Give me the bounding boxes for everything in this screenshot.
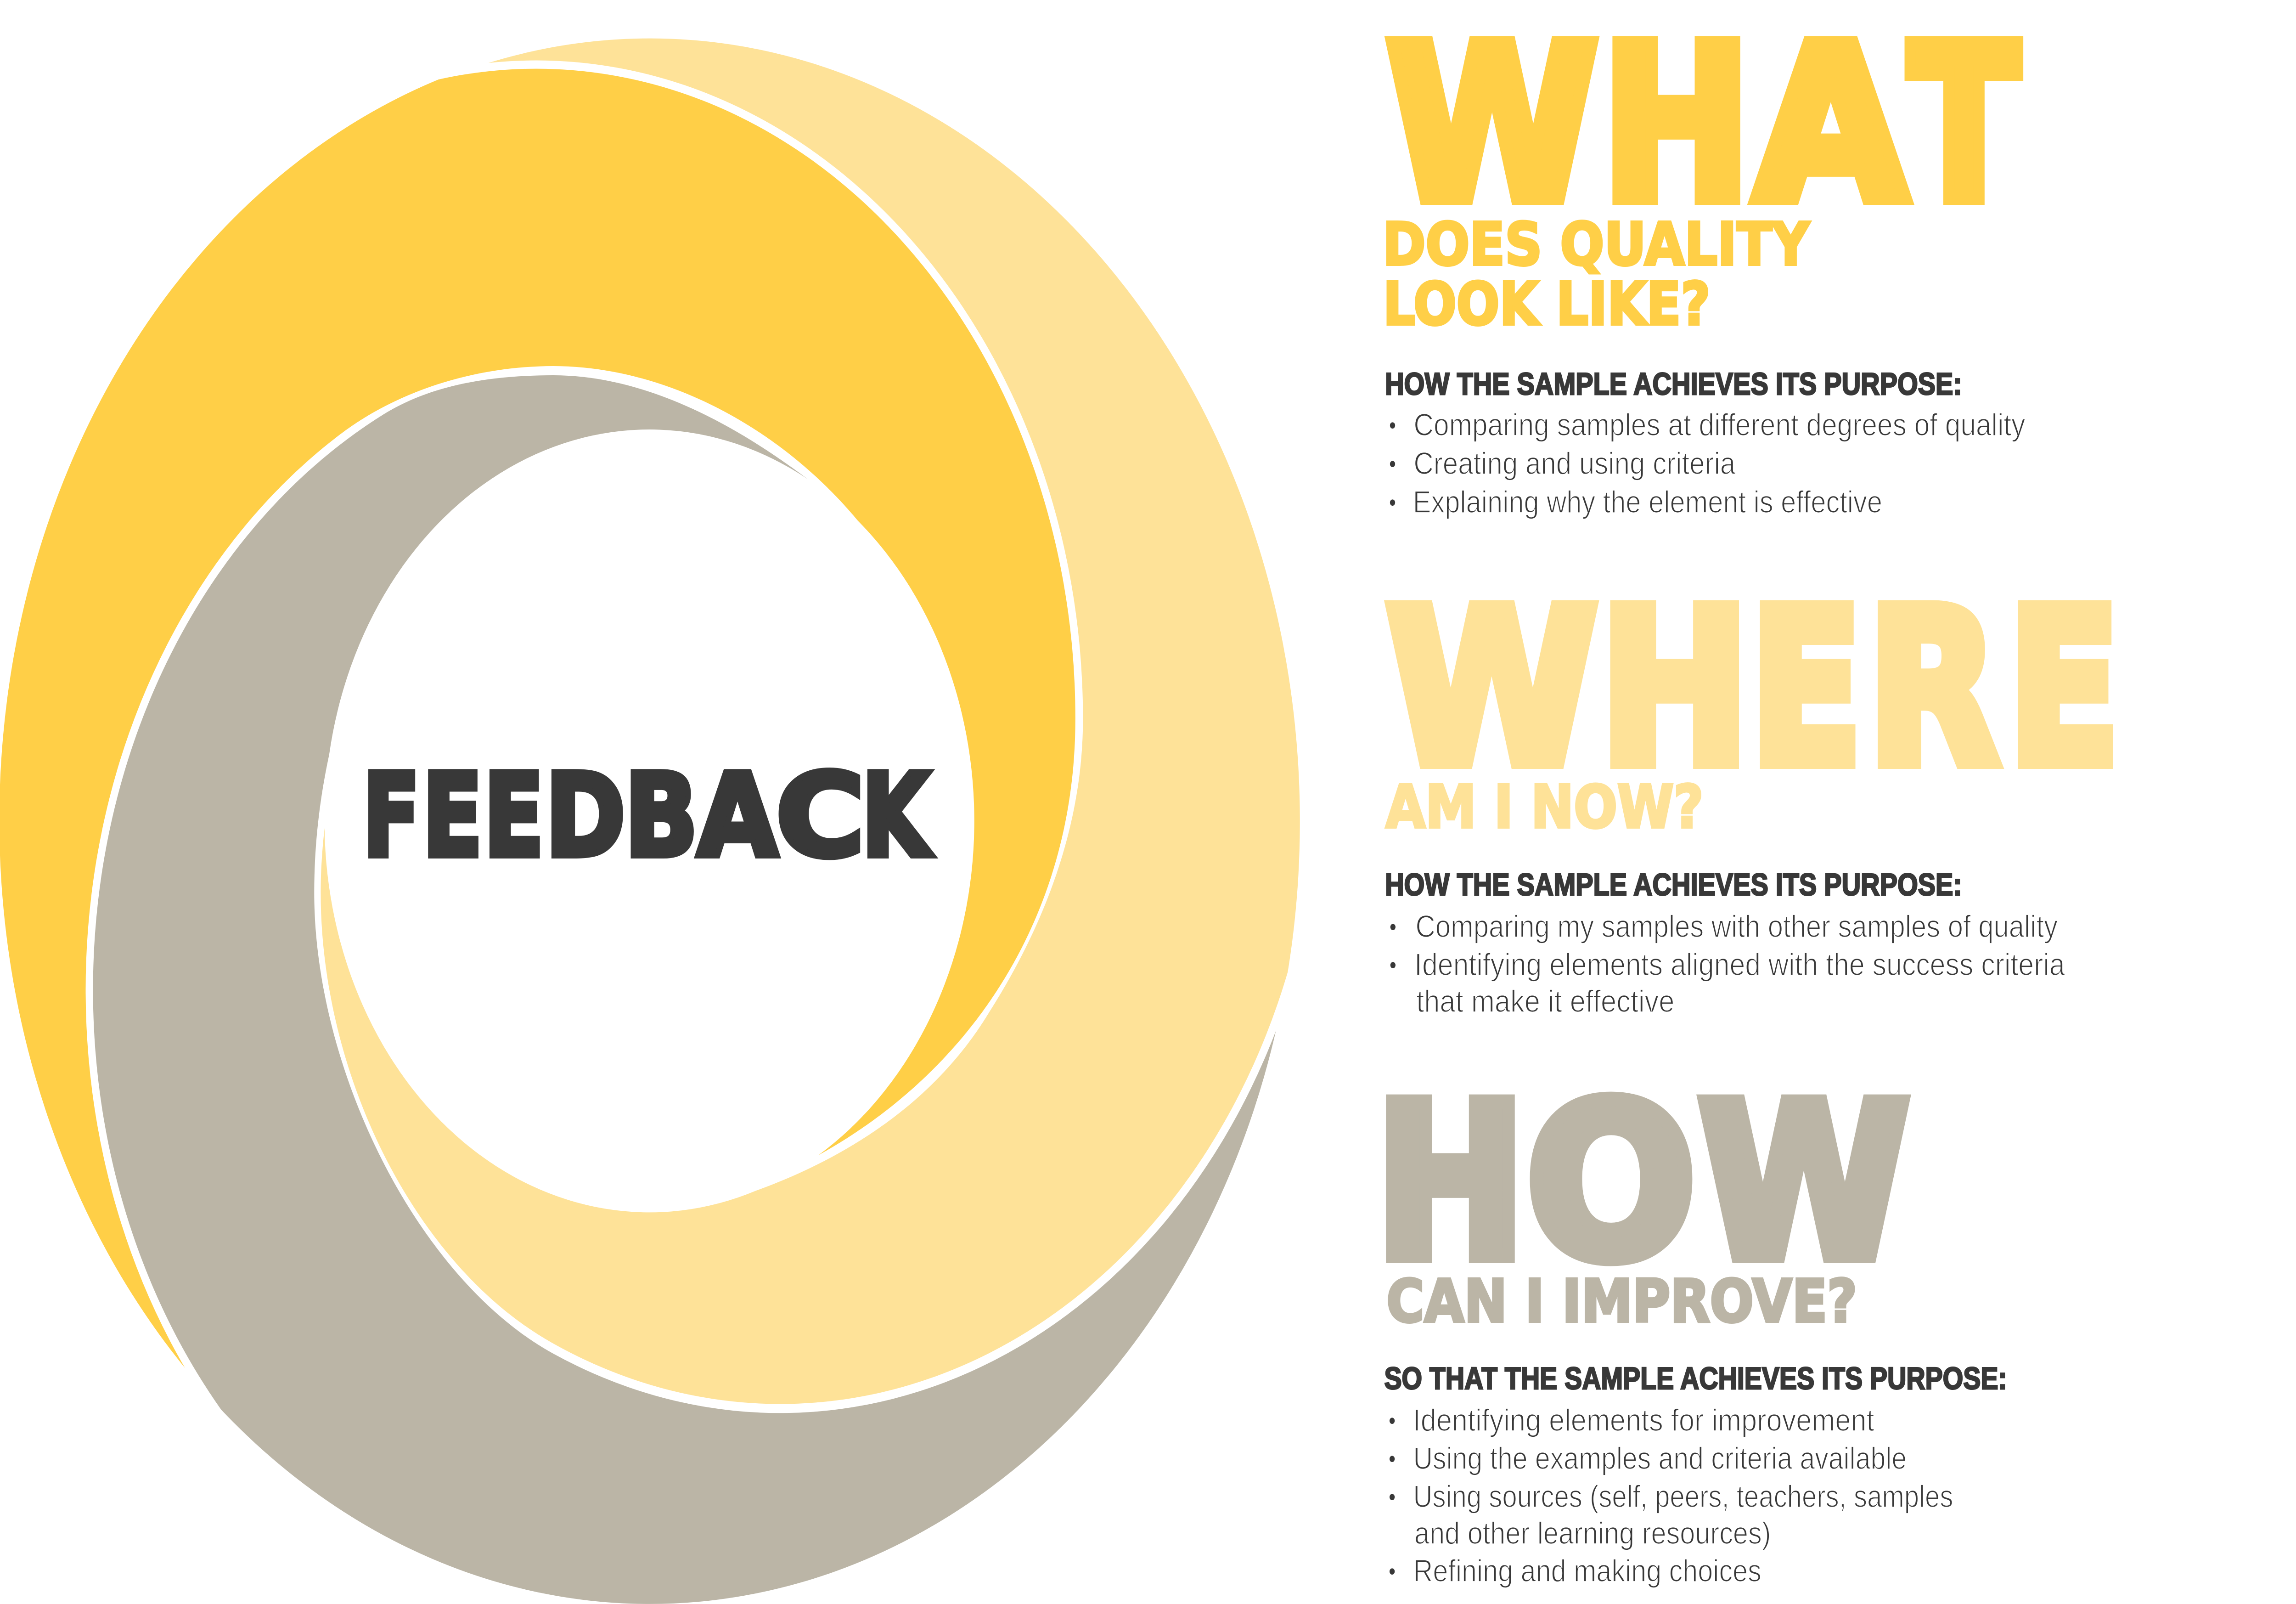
panel: where: [1385, 566, 2120, 1019]
subheading: can I improve: CAN I IMPROVE?: [1386, 1267, 1857, 1335]
panel: what: [1383, 2, 2026, 520]
subheading: does quality look like: LOOK LIKE?: [1383, 270, 1710, 338]
spiral diagram: [0, 39, 1300, 1604]
heading: WHAT: A: [1756, 2, 1907, 248]
bullet list: •: [1389, 1446, 1396, 1472]
heading: WHERE: E: [2009, 566, 2120, 812]
spiral segment: light yellow: [321, 39, 1300, 1404]
bullet list: Identifying elements aligned with the success criteria: [1414, 947, 2065, 982]
heading: WHERE: E: [1750, 566, 1862, 812]
title: FEEDBACK: C: [776, 749, 865, 882]
heading: WHAT: H: [1602, 2, 1750, 248]
heading: WHERE: R: [1868, 566, 1998, 812]
title: FEEDBACK: A: [698, 749, 777, 882]
bullet list: Creating and using criteria: [1413, 446, 1735, 481]
heading: WHERE: W: [1387, 566, 1597, 812]
bullet list: Using sources (self, peers, teachers, samples: [1413, 1479, 1953, 1514]
bullet list: Comparing samples at different degrees of quality: [1413, 407, 2026, 442]
heading: WHERE: H: [1600, 566, 1749, 812]
bullet list: Identifying elements for improvement: [1413, 1403, 1874, 1438]
bullet list: and other learning resources): [1414, 1516, 1771, 1551]
title: FEEDBACK: K: [862, 749, 933, 882]
subheading: does quality look like: DOES QUALITY: [1383, 210, 1810, 278]
heading: HOW: W: [1699, 1060, 1909, 1306]
bullet list: •: [1389, 1407, 1396, 1434]
title: FEEDBACK: E: [422, 749, 482, 882]
bullet list: •: [1389, 489, 1396, 515]
subheading: am I now: AM I NOW?: [1386, 773, 1704, 841]
text: list heading: HOW THE SAMPLE ACHIEVES ITS PURPOSE:: [1385, 367, 1962, 401]
heading: HOW: O: [1527, 1060, 1695, 1306]
bullet list: Using the examples and criteria available: [1413, 1441, 1907, 1476]
subheading: does quality look like: [1383, 210, 1810, 338]
bullet list: [1389, 407, 2026, 520]
title: FEEDBACK: D: [546, 749, 625, 882]
bullet list: that make it effective: [1416, 984, 1674, 1019]
title: FEEDBACK: E: [484, 749, 544, 882]
bullet list: Comparing my samples with other samples of quality: [1416, 909, 2058, 944]
text: list heading: HOW THE SAMPLE ACHIEVES ITS PURPOSE:: [1385, 867, 1962, 902]
heading: WHAT: T: [1909, 2, 2020, 248]
bullet list: [1390, 909, 2065, 1019]
heading: HOW: H: [1376, 1060, 1525, 1306]
bullet list: •: [1390, 914, 1396, 940]
bullet list: •: [1389, 1484, 1396, 1510]
bullet list: Explaining why the element is effective: [1413, 485, 1882, 520]
bullet list: Refining and making choices: [1413, 1553, 1761, 1588]
panel: how: [1376, 1060, 2007, 1588]
title: FEEDBACK: B: [625, 749, 698, 882]
bullet list: •: [1389, 412, 1396, 438]
bullet list: •: [1389, 1558, 1396, 1584]
heading: WHAT: W: [1387, 2, 1597, 248]
bullet list: •: [1390, 952, 1396, 978]
title: FEEDBACK: F: [363, 749, 420, 882]
spiral segment: grey: [93, 375, 1276, 1604]
text: list heading: SO THAT THE SAMPLE ACHIEVES ITS PURPOSE:: [1384, 1361, 2007, 1396]
bullet list: •: [1389, 451, 1396, 477]
bullet list: [1389, 1403, 1953, 1588]
spiral segment: yellow: [0, 69, 1075, 1368]
